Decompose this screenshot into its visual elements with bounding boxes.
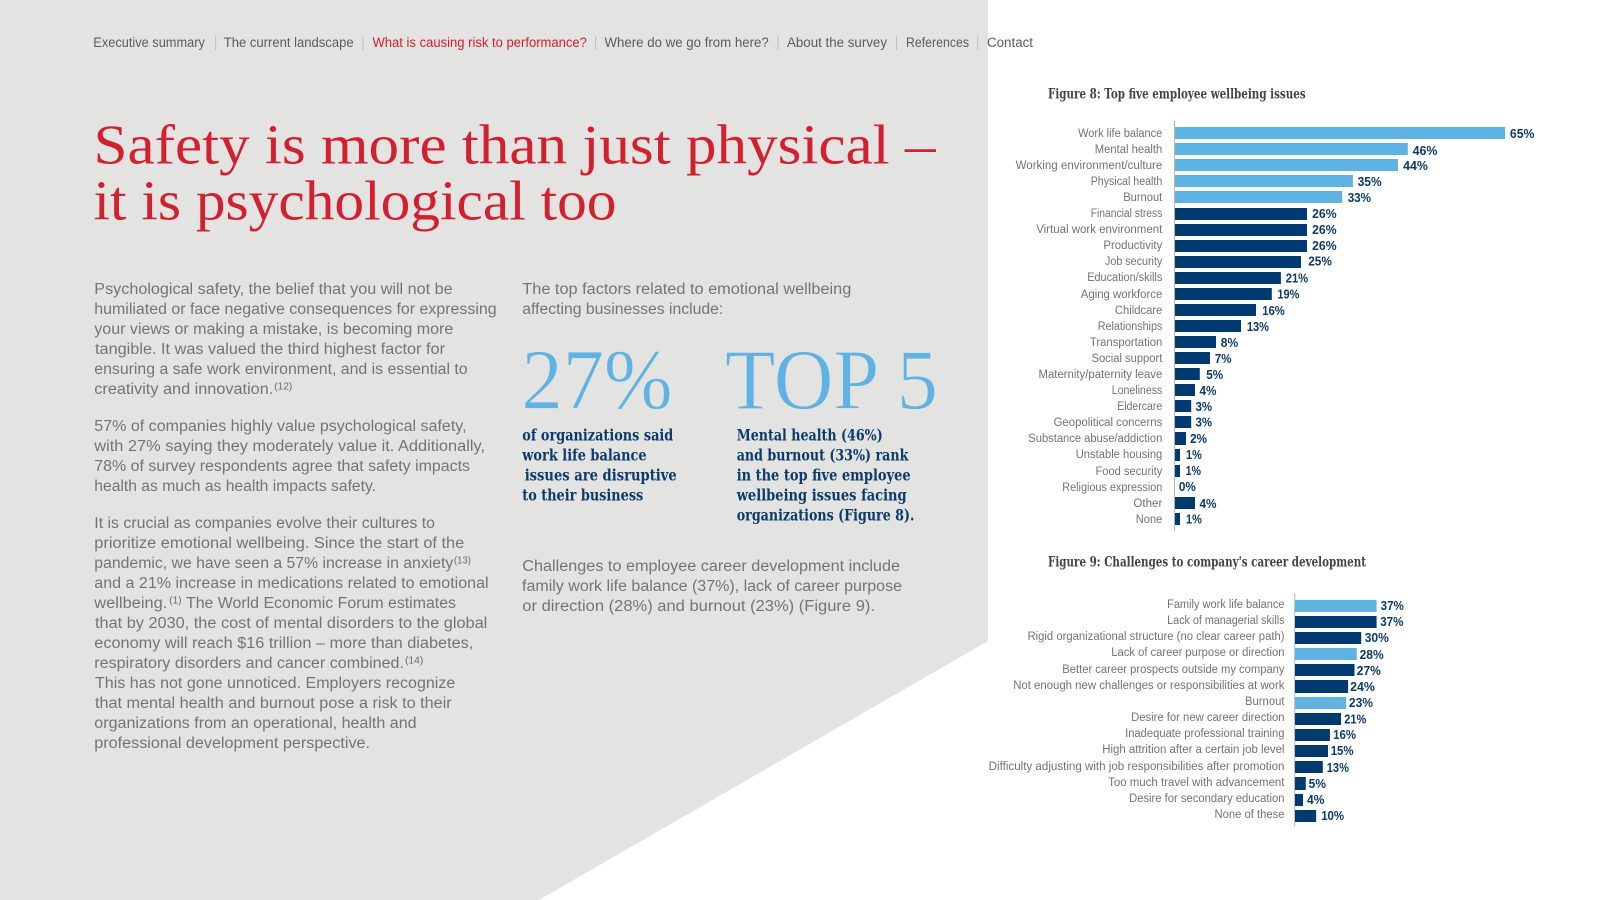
stat caption: 27%: of organizations said (522, 426, 673, 445)
row: Relationships: 13% (1247, 320, 1269, 334)
panel: grey background (0, 0, 988, 900)
row: Productivity (1103, 239, 1337, 253)
row: None (1136, 512, 1202, 526)
stat caption: TOP 5: wellbeing issues facing (736, 486, 907, 505)
text block: left column: creativity and innovation. (94, 381, 273, 398)
row: Aging workforce: 19% (1277, 288, 1300, 302)
navigation bar: Executive summary (93, 35, 205, 50)
text block: left column: that by 2030, the cost of mental disorders to the global (95, 615, 487, 632)
row: Eldercare (1117, 400, 1212, 414)
text block: top factors intro: affecting businesses include: (522, 301, 723, 318)
row: Burnout (1123, 191, 1371, 205)
title: it is psychological too (94, 170, 616, 232)
stat caption: 27%: work life balance (521, 446, 647, 465)
row: Not enough new challenges: 24% (1350, 680, 1375, 694)
row: Lack of managerial skills (1167, 615, 1404, 629)
row: Work life balance (1078, 127, 1534, 141)
row: None of these (1214, 809, 1344, 823)
row: None: None (1136, 514, 1162, 526)
row: Physical health: 35% (1358, 175, 1382, 189)
bar chart: figure 8 (1016, 121, 1534, 531)
row: Work life balance: 65% (1510, 127, 1534, 141)
heading: figure 9: Figure 9: Challenges to company's career development (1048, 555, 1367, 571)
text block: career development challenges (522, 558, 902, 615)
text block: left column: ensuring a safe work environment, and is essential to (94, 361, 468, 378)
text block: left column: (14) (405, 654, 423, 666)
row: Better career prospects outside my company: 27% (1357, 664, 1381, 678)
row: Family work life balance (1167, 599, 1404, 613)
row: Lack of career purpose or direction (1111, 647, 1384, 662)
row: Loneliness (1112, 384, 1216, 398)
text block: top factors intro (522, 281, 851, 318)
row: Education/skills (1087, 272, 1308, 286)
text block: left column: 78% of survey respondents agree that safety impacts (94, 458, 470, 475)
stat caption: TOP 5: organizations (Figure 8). (737, 506, 914, 525)
row: Rigid organizational structure: Rigid organizational structure (no clear career path) (1028, 631, 1285, 643)
row: Burnout: Burnout (1123, 192, 1163, 204)
row: High attrition after a certain job level: 15% (1331, 744, 1354, 758)
stat caption: TOP 5: and burnout (33%) rank (737, 446, 909, 465)
row: Eldercare: 3% (1196, 400, 1212, 414)
text block: left column: humiliated or face negative consequences for expressing (94, 301, 497, 318)
row: Mental health (1095, 143, 1438, 158)
text block: left column: professional development perspective. (94, 735, 370, 752)
row: Virtual work environment (1036, 223, 1337, 237)
row: Childcare (1115, 304, 1285, 318)
row: Burnout: 23% (1349, 696, 1373, 710)
text block: left column: tangible. It was valued the third highest factor for (95, 341, 445, 358)
row: Other: 4% (1200, 497, 1216, 511)
row: Work life balance: Work life balance (1078, 128, 1162, 140)
title: Safety is more than just physical – (94, 114, 937, 176)
navigation bar (93, 35, 1033, 50)
row: None of these: 10% (1321, 809, 1344, 823)
navigation bar: The current landscape (224, 35, 354, 50)
row: Loneliness: 4% (1200, 384, 1216, 398)
row: Geopolitical concerns: 3% (1196, 416, 1212, 430)
row: Desire for secondary education (1129, 793, 1324, 807)
row: Social support (1092, 352, 1232, 366)
row: Social support: Social support (1092, 353, 1163, 365)
navigation bar: Contact (987, 35, 1033, 50)
text block: career development challenges: family work life balance (37%), lack of career purpose (522, 578, 902, 595)
row: Rigid organizational structure (1028, 631, 1389, 645)
row: Religious expression: Religious expression (1062, 482, 1162, 494)
text block: career development challenges: or direction (28%) and burnout (23%) (Figure 9). (522, 598, 875, 615)
row: Social support: 7% (1215, 352, 1232, 366)
text block: left column: This has not gone unnoticed. Employers recognize (95, 675, 455, 692)
row: Too much travel with advancement (1108, 777, 1326, 791)
text block: left column: (12) (274, 380, 292, 392)
text block: left column (93, 281, 497, 752)
row: Substance abuse/addiction: 2% (1190, 432, 1207, 446)
text block: left column: health as much as health impacts safety. (94, 478, 376, 495)
row: Lack of career purpose or direction: 28% (1360, 648, 1384, 662)
row: Geopolitical concerns (1054, 416, 1212, 430)
row: Job security (1105, 254, 1332, 268)
row: Desire for secondary education: Desire for secondary education (1129, 793, 1284, 805)
text block: left column: with 27% saying they moderately value it. Additionally, (93, 438, 485, 455)
stat caption: 27%: to their business (522, 486, 643, 505)
row: Not enough new challenges (1013, 680, 1375, 694)
row: Lack of managerial skills: Lack of managerial skills (1167, 615, 1285, 627)
row: Productivity: 26% (1312, 239, 1337, 253)
row: Working environment/culture: 44% (1403, 159, 1428, 173)
row: Food security (1096, 464, 1201, 478)
text block: left column: respiratory disorders and cancer combined. (94, 655, 404, 672)
row: Inadequate professional training: Inadequate professional training (1125, 728, 1284, 740)
row: Mental health: 46% (1413, 144, 1438, 158)
row: Difficulty adjusting: Difficulty adjusting with job responsibilities after promotion (989, 761, 1284, 773)
row: Inadequate professional training: 16% (1333, 728, 1356, 742)
row: Other (1133, 497, 1216, 511)
text block: left column: (1) (169, 594, 182, 606)
navigation bar: What is causing risk to performance? (372, 35, 587, 50)
row: Working environment/culture: Working environment/culture (1016, 160, 1162, 172)
big stat: TOP 5: TOP 5 (725, 331, 938, 427)
stat caption: 27% (521, 426, 677, 505)
row: Burnout: Burnout (1245, 696, 1285, 708)
row: Job security: 25% (1308, 254, 1332, 268)
row: Burnout (1245, 696, 1373, 710)
text block: left column: that mental health and burnout pose a risk to their (95, 695, 452, 712)
row: Relationships (1098, 320, 1269, 334)
row: High attrition after a certain job level (1102, 744, 1354, 758)
row: Maternity/paternity leave (1038, 368, 1223, 382)
row: Working environment/culture (1016, 159, 1428, 173)
row: Lack of career purpose or direction: Lack of career purpose or direction (1111, 647, 1284, 659)
row: Difficulty adjusting: 13% (1327, 761, 1349, 775)
row: Desire for secondary education: 4% (1307, 793, 1324, 807)
text block: left column: It is crucial as companies evolve their cultures to (94, 515, 435, 532)
row: Too much travel with advancement: Too much travel with advancement (1108, 777, 1285, 789)
text block: left column: prioritize emotional wellbeing. Since the start of the (94, 535, 464, 552)
row: Education/skills: Education/skills (1087, 272, 1163, 284)
navigation bar: About the survey (787, 35, 887, 50)
row: Financial stress: Financial stress (1091, 208, 1163, 220)
row: Virtual work environment: Virtual work environment (1036, 224, 1163, 236)
row: Relationships: Relationships (1098, 321, 1163, 333)
row: Maternity/paternity leave: 5% (1206, 368, 1223, 382)
row: Substance abuse/addiction: Substance abuse/addiction (1028, 433, 1162, 445)
title (94, 114, 937, 232)
stat caption: TOP 5 (736, 426, 914, 525)
big stat: 27%: 27% (522, 331, 672, 427)
row: Lack of managerial skills: 37% (1380, 615, 1404, 629)
row: Desire for new career direction: Desire for new career direction (1131, 712, 1284, 724)
row: Unstable housing: Unstable housing (1076, 449, 1162, 461)
row: Loneliness: Loneliness (1112, 385, 1163, 397)
row: Burnout: 33% (1348, 191, 1371, 205)
text block: left column: The World Economic Forum estimates (186, 595, 456, 612)
row: Childcare: 16% (1262, 304, 1285, 318)
row: Productivity: Productivity (1103, 240, 1163, 252)
row: Childcare: Childcare (1115, 305, 1162, 317)
row: Transportation: Transportation (1090, 337, 1162, 349)
heading: figure 8: Figure 8: Top five employee wellbeing issues (1048, 87, 1306, 103)
text block: left column: 57% of companies highly value psychological safety, (94, 418, 467, 435)
text block: left column: pandemic, we have seen a 57% increase in anxiety (94, 555, 454, 572)
navigation bar: References (906, 35, 969, 50)
row: Better career prospects outside my company: Better career prospects outside my company (1062, 664, 1285, 676)
row: Religious expression: 0% (1179, 480, 1196, 494)
row: High attrition after a certain job level: High attrition after a certain job level (1102, 744, 1284, 756)
row: Aging workforce: Aging workforce (1081, 289, 1162, 301)
text block: left column: your views or making a mistake, is becoming more (94, 321, 453, 338)
row: Physical health (1091, 175, 1382, 189)
row: Family work life balance: 37% (1381, 599, 1404, 613)
row: Food security: 1% (1186, 464, 1201, 478)
row: Desire for new career direction (1131, 712, 1366, 726)
row: Unstable housing (1076, 448, 1202, 462)
row: Aging workforce (1081, 288, 1300, 302)
row: Transportation (1090, 336, 1238, 350)
row: Physical health: Physical health (1091, 176, 1162, 188)
row: None of these: None of these (1214, 809, 1284, 821)
text block: career development challenges: Challenges to employee career development include (522, 558, 900, 575)
text block: left column: (13) (454, 554, 471, 566)
text block: left column: organizations from an operational, health and (94, 715, 417, 732)
row: Desire for new career direction: 21% (1344, 712, 1366, 726)
text block: left column: wellbeing. (93, 595, 167, 612)
row: None: 1% (1186, 512, 1202, 526)
row: Too much travel with advancement: 5% (1309, 777, 1326, 791)
row: Rigid organizational structure: 30% (1365, 631, 1389, 645)
row: Mental health: Mental health (1095, 144, 1162, 156)
bar chart: figure 9 (989, 593, 1404, 827)
row: Financial stress: 26% (1312, 207, 1337, 221)
row: Better career prospects outside my company (1062, 664, 1381, 678)
row: Unstable housing: 1% (1186, 448, 1202, 462)
text block: left column: Psychological safety, the belief that you will not be (94, 281, 453, 298)
row: Other: Other (1133, 498, 1162, 510)
row: Virtual work environment: 26% (1312, 223, 1337, 237)
navigation bar: Where do we go from here? (604, 35, 769, 50)
row: Substance abuse/addiction (1028, 432, 1207, 446)
row: Family work life balance: Family work life balance (1167, 599, 1284, 611)
text block: top factors intro: The top factors related to emotional wellbeing (522, 281, 851, 298)
row: Religious expression (1062, 480, 1196, 494)
row: Geopolitical concerns: Geopolitical concerns (1054, 417, 1163, 429)
row: Maternity/paternity leave: Maternity/paternity leave (1038, 369, 1162, 381)
stat caption: TOP 5: in the top five employee (737, 466, 911, 485)
row: Inadequate professional training (1125, 728, 1356, 742)
row: Job security: Job security (1105, 256, 1163, 268)
row: Food security: Food security (1096, 466, 1163, 478)
row: Education/skills: 21% (1286, 272, 1308, 286)
row: Eldercare: Eldercare (1117, 401, 1162, 413)
stat caption: 27%: issues are disruptive (525, 466, 677, 485)
text block: left column: economy will reach $16 trillion – more than diabetes, (94, 635, 473, 652)
stat caption: TOP 5: Mental health (46%) (737, 426, 883, 445)
row: Financial stress (1091, 207, 1337, 221)
row: Difficulty adjusting (989, 761, 1349, 775)
row: Not enough new challenges: Not enough new challenges or responsibilities at work (1013, 680, 1285, 692)
row: Transportation: 8% (1221, 336, 1238, 350)
text block: left column: and a 21% increase in medications related to emotional (94, 575, 489, 592)
